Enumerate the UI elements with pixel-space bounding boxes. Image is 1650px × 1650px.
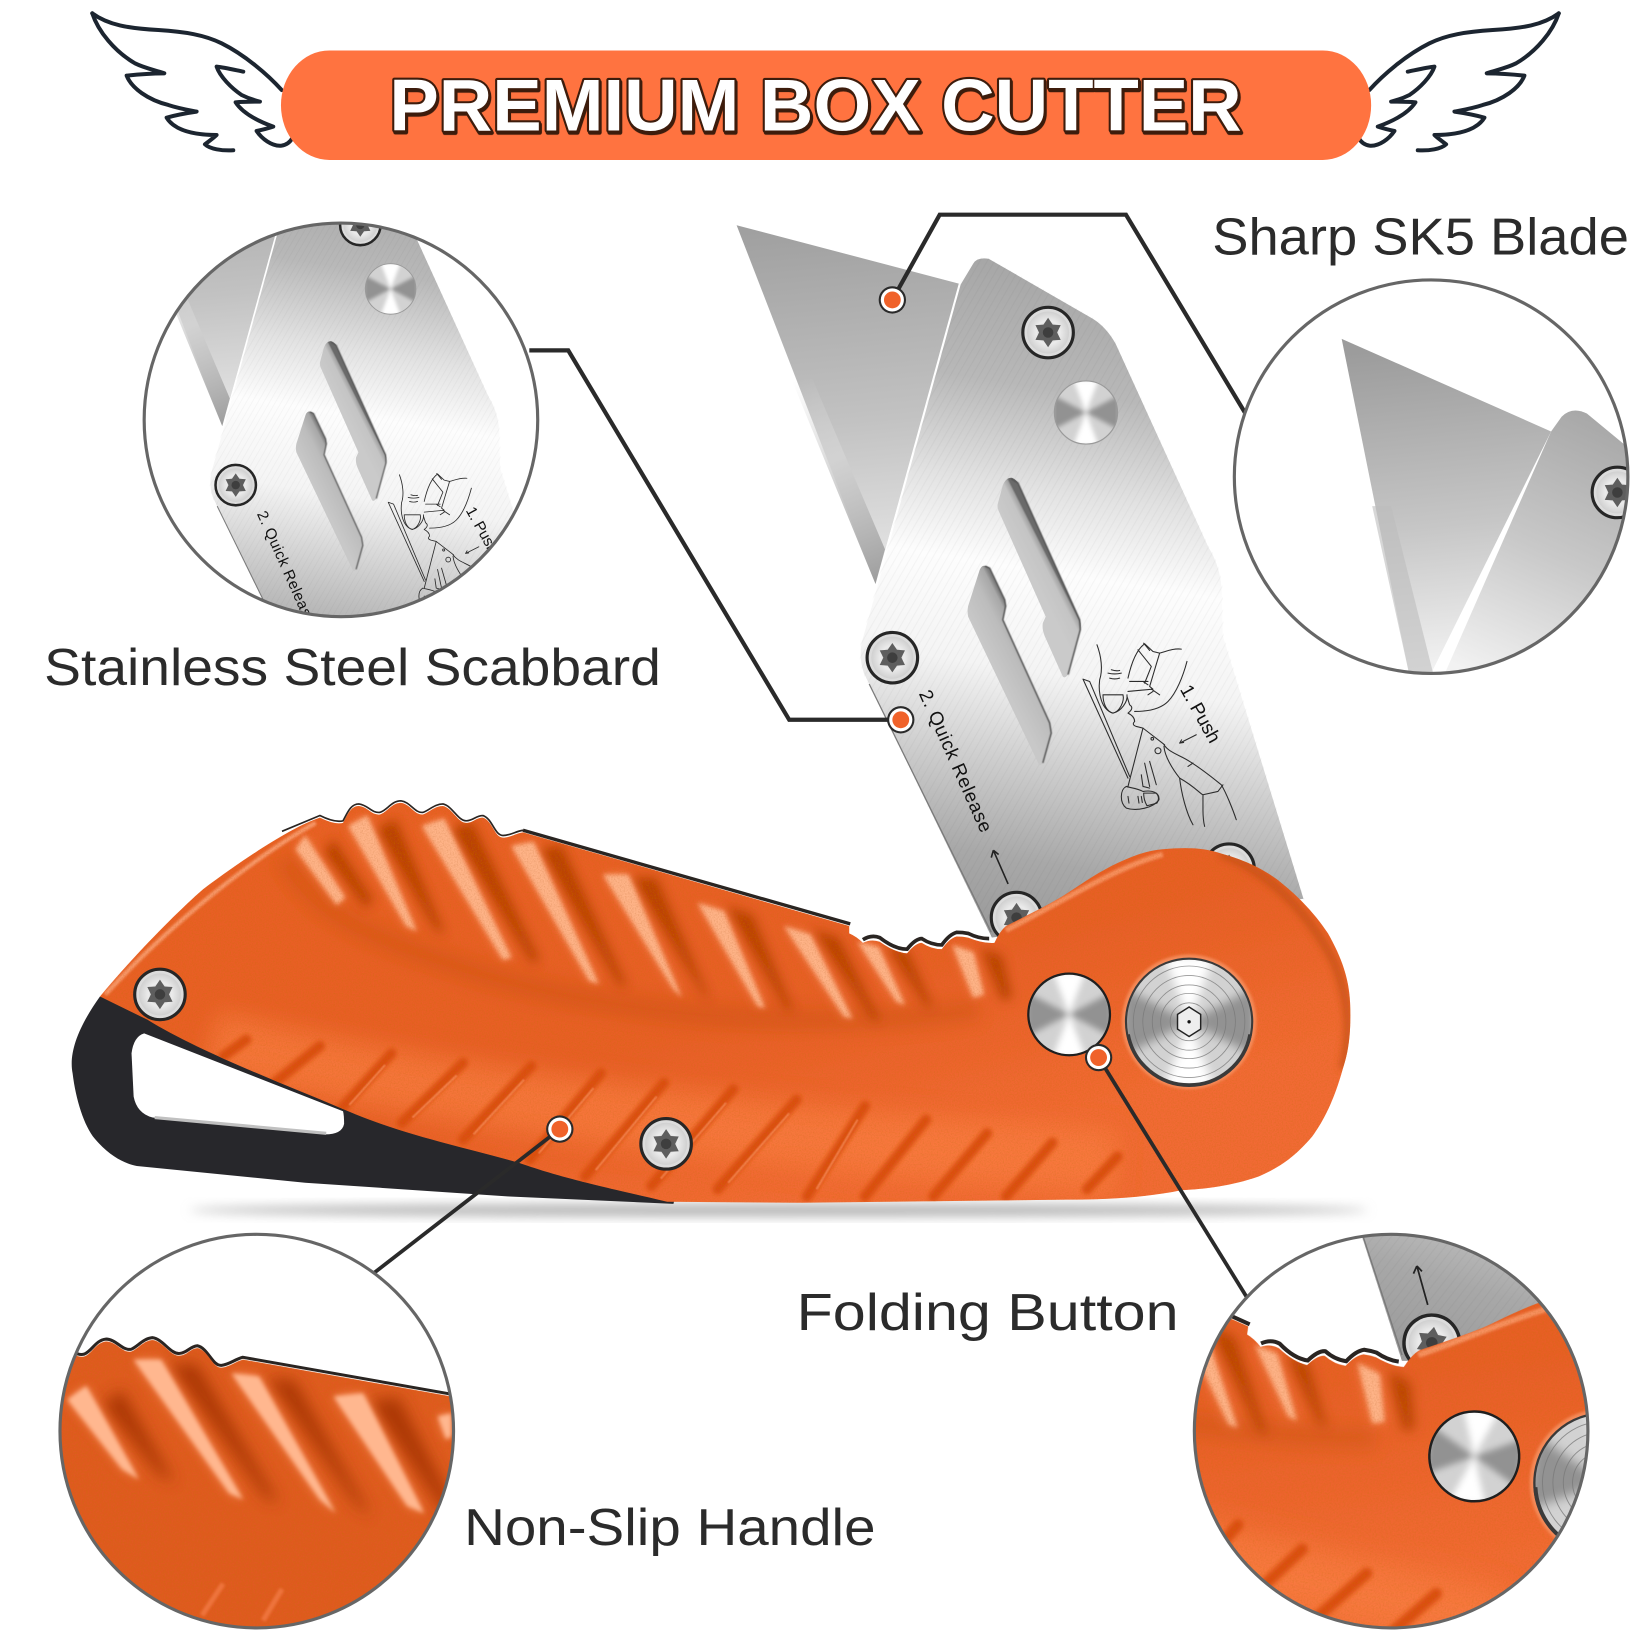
label: sharp sk5 blade: Sharp SK5 Blade bbox=[1212, 208, 1629, 266]
engraving text: quick release: 2. Quick Release bbox=[914, 687, 996, 836]
handle shading bbox=[284, 858, 979, 1021]
engraving text: push: 1. Push bbox=[1175, 681, 1224, 747]
callout line: handle bbox=[374, 1129, 560, 1273]
stainless steel scabbard bbox=[860, 257, 1305, 943]
lower ridge glints bbox=[349, 1065, 858, 1189]
knife ground shadow bbox=[189, 1204, 1368, 1216]
orange handle bbox=[100, 803, 1350, 1203]
icon: right wing bbox=[1359, 13, 1559, 150]
label: stainless steel scabbard: Stainless Steel Scabbard bbox=[44, 638, 661, 696]
scabbard screw bottom bbox=[991, 892, 1042, 943]
crop teeth edge bbox=[1232, 1315, 1399, 1364]
panel: blade detail circle bbox=[1234, 280, 1647, 673]
folding button bbox=[1122, 954, 1256, 1089]
callout dot: blade bbox=[879, 286, 906, 314]
callout line: scabbard bbox=[529, 350, 901, 720]
scabbard screw hidden bbox=[1204, 844, 1254, 894]
black hook bbox=[72, 997, 684, 1204]
crop ridge highlights bbox=[67, 1360, 451, 1513]
callout dot: scabbard bbox=[887, 706, 914, 733]
scabbard slot upper bbox=[998, 478, 1081, 677]
title banner bbox=[281, 51, 1371, 160]
blade spine sliver bbox=[282, 801, 989, 949]
hook opening bbox=[132, 1033, 344, 1134]
handle crop body bbox=[62, 1340, 452, 1626]
callout line: folding button bbox=[1099, 1058, 1247, 1297]
crop handle body bbox=[1196, 1302, 1586, 1626]
top ridges highlight bbox=[296, 816, 984, 1019]
sk5 blade bbox=[737, 225, 961, 584]
crop lower streaks bbox=[202, 1584, 282, 1621]
scabbard screw top bbox=[1023, 307, 1073, 358]
icon: left wing bbox=[92, 13, 292, 150]
panel: folding button detail circle bbox=[1192, 1232, 1590, 1630]
lower grip ridges bbox=[223, 1040, 1118, 1196]
handle screw left bbox=[135, 969, 185, 1020]
crop ridge glow bbox=[67, 1360, 451, 1513]
engraved hand diagram bbox=[1083, 643, 1236, 826]
label: non-slip handle: Non-Slip Handle bbox=[464, 1498, 876, 1556]
scabbard screw left bbox=[867, 632, 918, 683]
panel: scabbard detail circle: 2. Quick Release bbox=[253, 508, 319, 628]
blade and scabbard bbox=[737, 225, 1305, 943]
scabbard slot lower bbox=[968, 566, 1051, 765]
top ridges glow bbox=[296, 816, 984, 1019]
title: PREMIUM BOX CUTTER bbox=[389, 63, 1242, 146]
callout dot: folding button bbox=[1085, 1044, 1112, 1071]
crop ridge shadows bbox=[103, 1364, 487, 1517]
folding knife bbox=[72, 225, 1350, 1204]
handle crop spine bbox=[77, 1336, 449, 1396]
pivot disc bbox=[1026, 972, 1112, 1057]
callout dot: handle bbox=[546, 1115, 574, 1143]
panel: scabbard detail circle: 1. Push bbox=[462, 504, 501, 556]
panel: scabbard detail circle bbox=[142, 222, 540, 618]
pivot and button hardware bbox=[1026, 954, 1256, 1089]
top ridges shadow bbox=[324, 819, 1012, 1022]
panel: handle detail circle bbox=[58, 1232, 456, 1630]
release arrow bbox=[991, 850, 1008, 884]
scabbard rivet bbox=[1053, 379, 1119, 446]
handle screw lower bbox=[641, 1119, 691, 1169]
label: folding button: Folding Button bbox=[797, 1283, 1179, 1341]
callout line: blade bbox=[892, 215, 1245, 412]
